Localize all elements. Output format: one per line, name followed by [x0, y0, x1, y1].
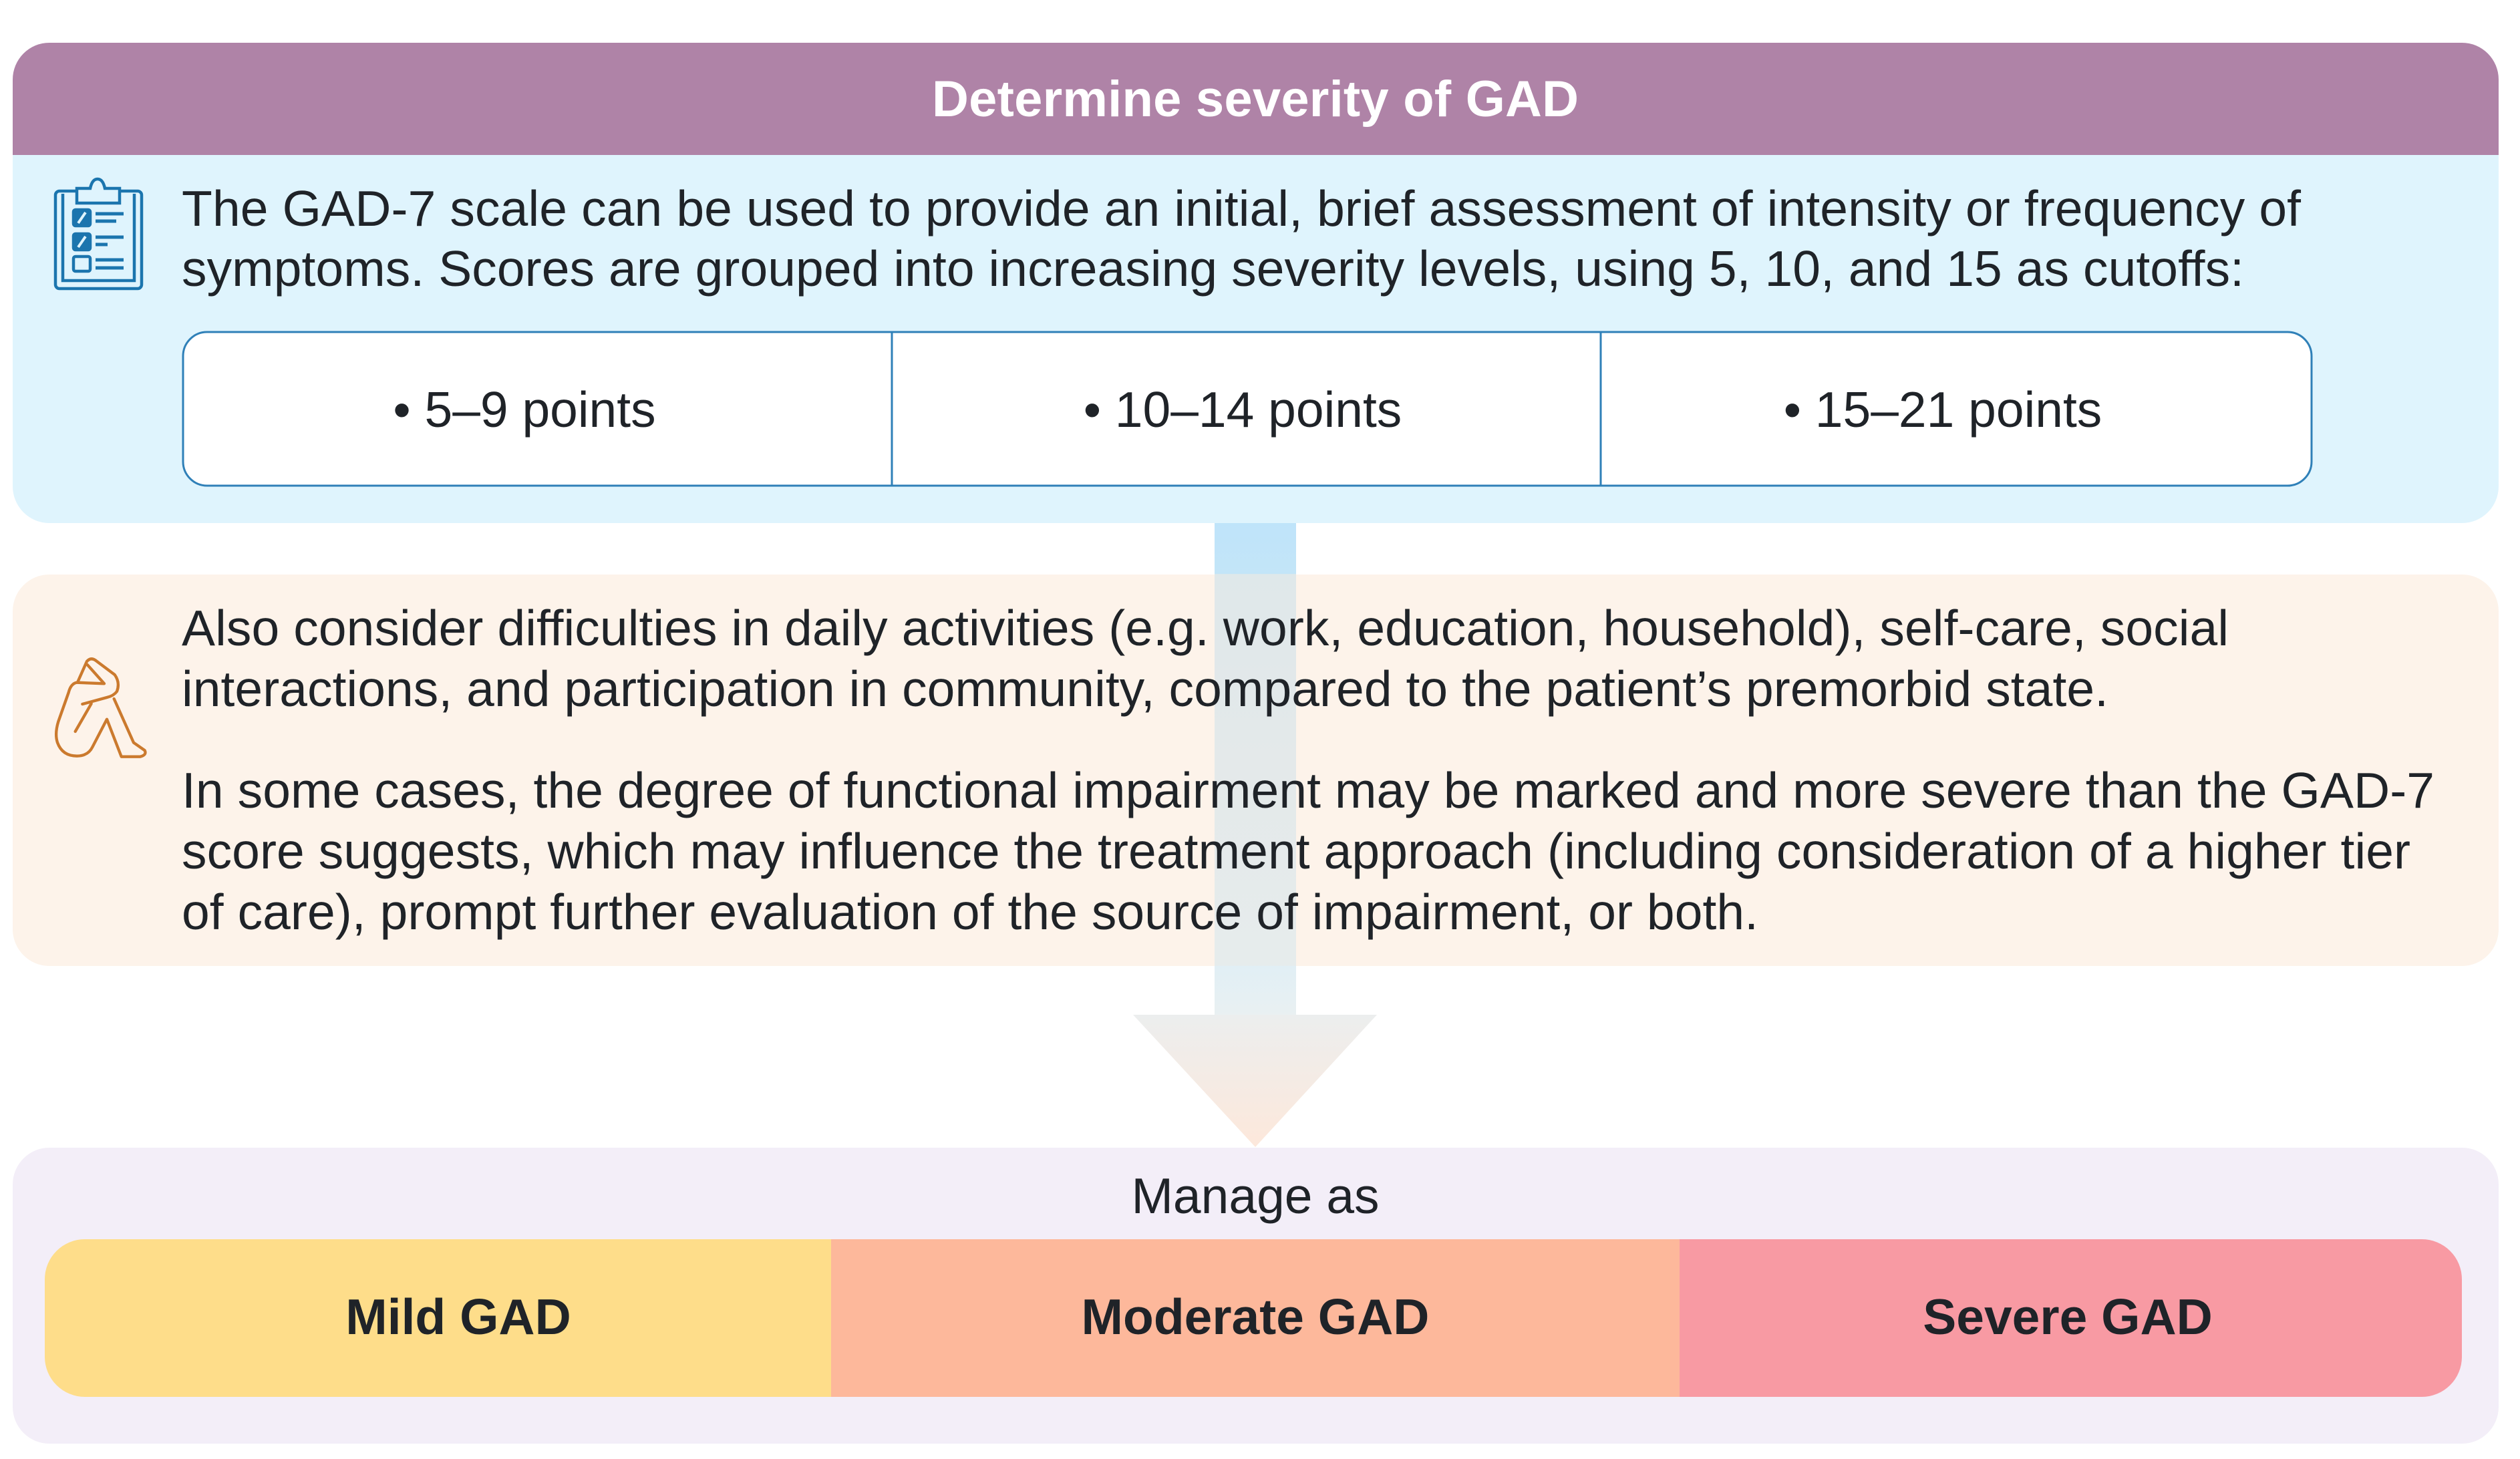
icon: person hugging knees — [56, 659, 145, 757]
paragraph: degree of impairment — [182, 762, 2434, 940]
intro text: symptoms. Scores are grouped into increasing severity levels, using 5, 10, and 15 as cutoffs: — [182, 240, 2244, 297]
title: Determine severity of GAD — [932, 71, 1579, 128]
paragraph: degree of impairment: of care), prompt further evaluation of the source of impairment, or both. — [182, 884, 1758, 940]
paragraph: degree of impairment: score suggests, which may influence the treatment approach (including consideration of a higher tier — [182, 823, 2410, 879]
intro text: The GAD-7 scale can be used to provide an initial, brief assessment of intensity or frequency of — [182, 180, 2301, 236]
impairment text — [182, 600, 2434, 940]
severity: severe: Severe GAD — [1923, 1289, 2213, 1345]
score range: 5-9 points: • 5–9 points — [393, 381, 656, 438]
severity: moderate: Moderate GAD — [1082, 1289, 1429, 1345]
paragraph: daily activities: interactions, and participation in community, compared to the patient’s premorbid state. — [182, 661, 2108, 717]
panel: manage as background — [13, 1148, 2499, 1444]
header bar — [13, 43, 2499, 155]
paragraph: daily activities: Also consider difficulties in daily activities (e.g. work, education, household), self-care, social — [182, 600, 2229, 656]
score range: 10-14 points: • 10–14 points — [1084, 381, 1402, 438]
manage as label: Manage as — [1131, 1168, 1380, 1224]
arrow: downward flow — [1133, 523, 1377, 1147]
paragraph: daily activities — [182, 600, 2229, 717]
intro text — [182, 180, 2301, 297]
score ranges table — [183, 332, 2312, 486]
panel: GAD-7 scale — [13, 43, 2499, 523]
panel: functional impairment background — [13, 575, 2499, 966]
paragraph: degree of impairment: In some cases, the degree of functional impairment may be marked and more severe than the GAD-7 — [182, 762, 2434, 818]
severity: moderate — [831, 1239, 1680, 1397]
severity bar — [45, 1239, 2462, 1397]
score range: 15-21 points: • 15–21 points — [1784, 381, 2102, 438]
severity: mild: Mild GAD — [345, 1289, 571, 1345]
severity: mild — [45, 1239, 831, 1397]
severity: severe — [1680, 1239, 2462, 1397]
panel background: light blue — [13, 155, 2499, 523]
icon: clipboard checklist — [55, 179, 142, 289]
